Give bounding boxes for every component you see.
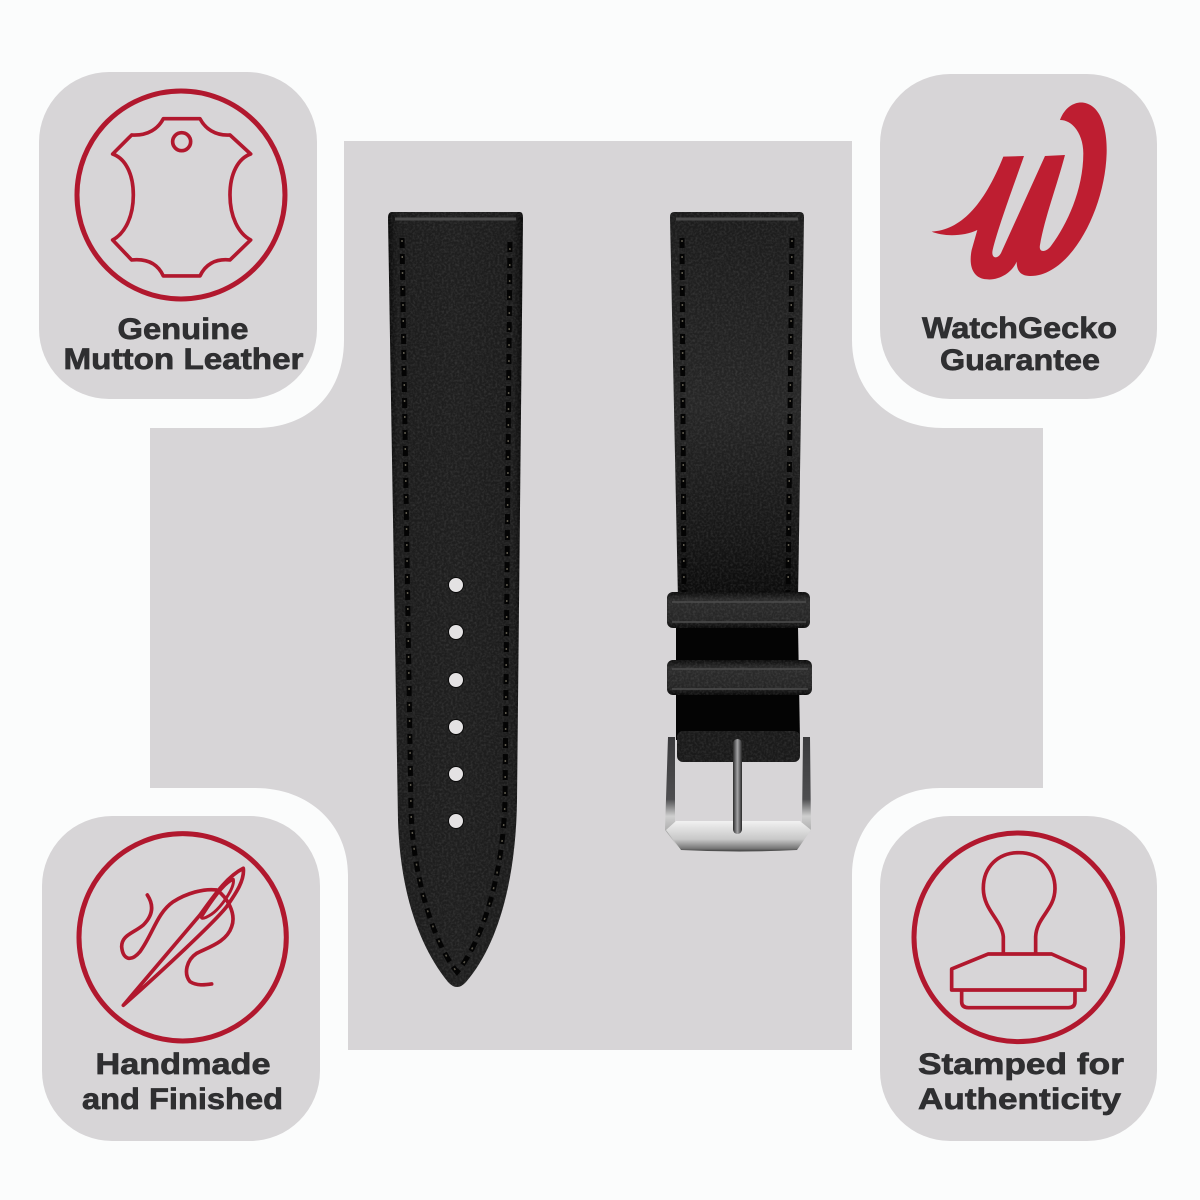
label: Genuine: [118, 313, 248, 346]
product: watch strap long piece: [388, 212, 523, 987]
buckle: [665, 737, 811, 852]
top edge highlight: [395, 218, 516, 220]
label: Stamped for: [918, 1048, 1124, 1081]
card: Stamped for Authenticity: [880, 816, 1157, 1141]
lower strap: [676, 626, 800, 740]
strap holes: [448, 578, 464, 828]
buckle plate: [666, 821, 811, 852]
keeper two: [667, 660, 812, 695]
stitching right strap: [682, 238, 792, 592]
upper strap: [670, 212, 804, 600]
product: watch strap buckle piece: [665, 212, 812, 852]
top edge highlight: [676, 218, 798, 220]
strap body with pointed tip: [388, 212, 523, 987]
icon: WatchGecko W logo: [932, 103, 1107, 279]
card: Genuine Mutton Leather: [39, 72, 317, 399]
stitching: [402, 238, 510, 972]
icon: leather hide: [77, 91, 285, 299]
keeper one: [667, 592, 810, 628]
stitching thread dots: [402, 240, 510, 972]
icon: needle and thread: [79, 834, 286, 1041]
card: Handmade and Finished: [42, 816, 320, 1141]
label line two: Mutton Leather: [64, 343, 304, 376]
label line two: and Finished: [82, 1083, 283, 1116]
label line two: Authenticity: [918, 1083, 1121, 1116]
label line two: Guarantee: [940, 344, 1100, 377]
lower strap fold: [677, 731, 800, 762]
label: WatchGecko: [922, 312, 1117, 345]
card: WatchGecko Guarantee: [880, 74, 1157, 399]
stitching thread dots right strap: [682, 240, 792, 592]
label: Handmade: [96, 1048, 270, 1081]
buckle tongue: [733, 739, 742, 834]
background panel: central grey cross shape: [150, 141, 1043, 1050]
icon: rubber stamp: [914, 833, 1123, 1042]
